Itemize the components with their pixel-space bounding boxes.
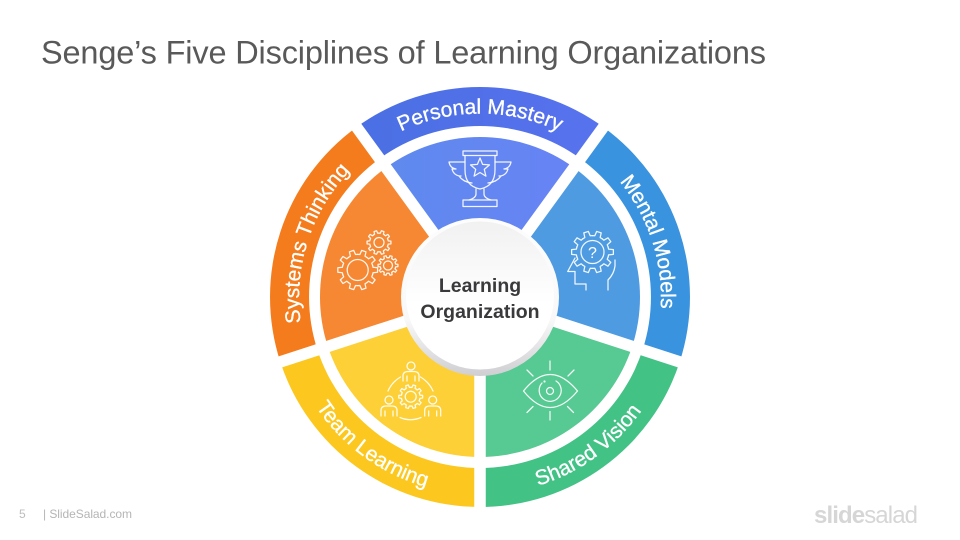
title: Senge’s Five Disciplines of Learning Organizations bbox=[41, 34, 766, 70]
center label: Learning bbox=[439, 275, 521, 297]
panel: five disciplines wheel bbox=[270, 87, 690, 507]
icon: trophy bbox=[449, 151, 511, 206]
wedge: Team Learning bbox=[328, 297, 480, 457]
center circle bbox=[401, 218, 559, 376]
segment: Shared Vision outer band bbox=[480, 350, 680, 507]
wedge: Mental Models bbox=[480, 168, 640, 346]
segment: Mental Models outer band bbox=[580, 127, 690, 362]
icon: eye bbox=[524, 361, 578, 420]
label: Mental Models: Mental Models bbox=[620, 174, 676, 308]
segment: Team Learning outer band bbox=[280, 350, 480, 507]
white separators between segments bbox=[271, 119, 689, 517]
wedge: Personal Mastery bbox=[386, 137, 574, 297]
footer source: | SlideSalad.com bbox=[43, 507, 132, 521]
icon: head with question gear bbox=[568, 231, 615, 290]
segment: Personal Mastery outer band bbox=[357, 87, 603, 159]
icon: team around gear bbox=[381, 362, 441, 420]
wedge: Systems Thinking bbox=[320, 168, 480, 346]
label: Personal Mastery: Personal Mastery bbox=[396, 98, 564, 132]
label: Team Learning: Team Learning bbox=[318, 398, 428, 490]
logo: slidesalad: slidesalad bbox=[814, 502, 918, 529]
label: Systems Thinking: Systems Thinking bbox=[285, 164, 351, 322]
segment: Systems Thinking outer band bbox=[270, 127, 380, 362]
label: Shared Vision: Shared Vision bbox=[536, 406, 642, 484]
question mark: ? bbox=[588, 245, 597, 262]
icon: gears bbox=[338, 230, 398, 290]
page number: 5 bbox=[19, 507, 26, 521]
center circle: Organization bbox=[420, 301, 540, 323]
wedge: Shared Vision bbox=[480, 297, 632, 457]
